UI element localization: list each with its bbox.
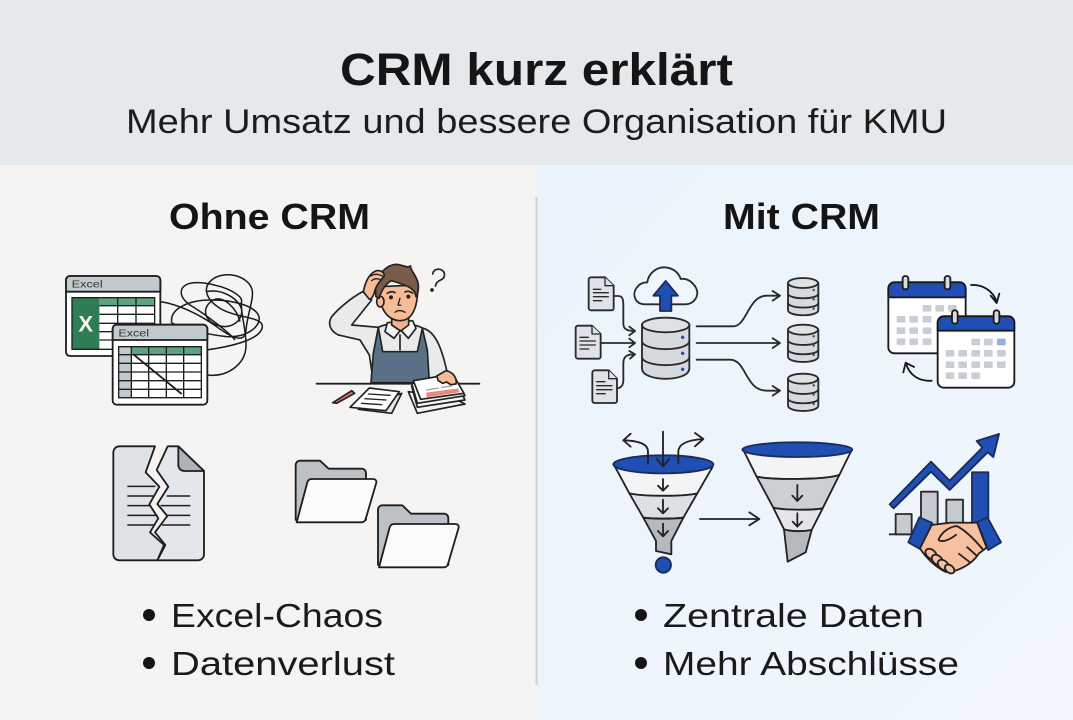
papers left bbox=[358, 393, 402, 413]
pencil bbox=[333, 391, 355, 403]
icon: calendars with sync arrows bbox=[888, 276, 1014, 388]
excel sheet back bbox=[66, 276, 160, 356]
documents bbox=[576, 277, 617, 403]
icon: optimized funnel bbox=[742, 442, 852, 562]
funnel mouth bbox=[742, 442, 852, 457]
funnel arrows bbox=[657, 432, 669, 536]
folded corner bbox=[178, 446, 204, 471]
bullet item: Mehr Abschlüsse: Mehr Abschlüsse bbox=[663, 645, 959, 682]
excel sheet back: Excel bbox=[72, 280, 103, 291]
funnel mouth bbox=[613, 455, 713, 473]
sync arrows bbox=[971, 285, 999, 303]
scribble tangle bbox=[161, 275, 262, 375]
panel: left background bbox=[0, 165, 535, 720]
desk line bbox=[317, 381, 479, 386]
folder one bbox=[296, 461, 376, 522]
panel: right background bbox=[535, 165, 1073, 720]
heading: Mit CRM: Mit CRM bbox=[723, 196, 880, 237]
bullet list: mit CRM bbox=[635, 597, 959, 682]
small databases bbox=[788, 278, 818, 411]
icon: confused person at desk bbox=[317, 264, 479, 413]
bars bbox=[889, 472, 988, 534]
bullet item: Datenverlust: Datenverlust bbox=[171, 645, 395, 682]
heading: Ohne CRM: Ohne CRM bbox=[169, 196, 370, 237]
icon: central database with cloud and data flows bbox=[576, 267, 818, 411]
cuffs bbox=[908, 517, 932, 550]
icon: folders bbox=[296, 461, 459, 567]
hand on papers bbox=[437, 371, 456, 385]
connecting arrow bbox=[700, 512, 759, 525]
text lines left bbox=[127, 486, 157, 525]
icon: growth chart with handshake bbox=[889, 434, 1001, 575]
subtitle: Mehr Umsatz und bessere Organisation für KMU bbox=[126, 103, 947, 141]
excel sheet front bbox=[113, 325, 207, 405]
panel: header band bbox=[0, 0, 1073, 165]
funnel arrows bbox=[792, 485, 802, 527]
hair bbox=[376, 264, 418, 298]
excel sheet front: Excel bbox=[118, 328, 149, 339]
cloud bbox=[634, 267, 697, 304]
front calendar bbox=[938, 310, 1014, 388]
text lines right bbox=[161, 496, 190, 525]
neck and head bbox=[392, 315, 409, 331]
growth arrow bbox=[890, 434, 999, 508]
upload arrow bbox=[653, 281, 678, 311]
funnel bands bbox=[743, 450, 852, 479]
main database bbox=[642, 318, 689, 379]
icon: torn document bbox=[113, 446, 204, 560]
face bbox=[387, 291, 413, 293]
raised hand bbox=[363, 271, 384, 299]
back calendar bbox=[888, 276, 966, 353]
left half bbox=[113, 446, 164, 560]
icon: excel sheets with tangled scribble bbox=[66, 275, 262, 405]
bullet item: Excel-Chaos: Excel-Chaos bbox=[171, 597, 383, 634]
apron bbox=[371, 327, 429, 383]
conversion dot bbox=[656, 557, 671, 573]
icon: unfiltered sales funnel bbox=[613, 432, 759, 573]
input arrows bbox=[614, 296, 635, 335]
title: CRM kurz erklärt bbox=[340, 44, 733, 95]
shirt and torso bbox=[330, 292, 447, 382]
folder two bbox=[378, 505, 459, 567]
excel sheet back: X bbox=[78, 312, 93, 337]
funnel bands bbox=[615, 467, 713, 496]
paper stack bbox=[408, 392, 465, 413]
bullet list: ohne CRM bbox=[143, 597, 395, 682]
question mark bbox=[433, 269, 444, 286]
collar bbox=[385, 321, 416, 338]
right half bbox=[155, 446, 204, 560]
output arrows bbox=[697, 291, 780, 326]
handshake bbox=[920, 522, 987, 575]
bullet item: Zentrale Daten: Zentrale Daten bbox=[663, 597, 924, 634]
